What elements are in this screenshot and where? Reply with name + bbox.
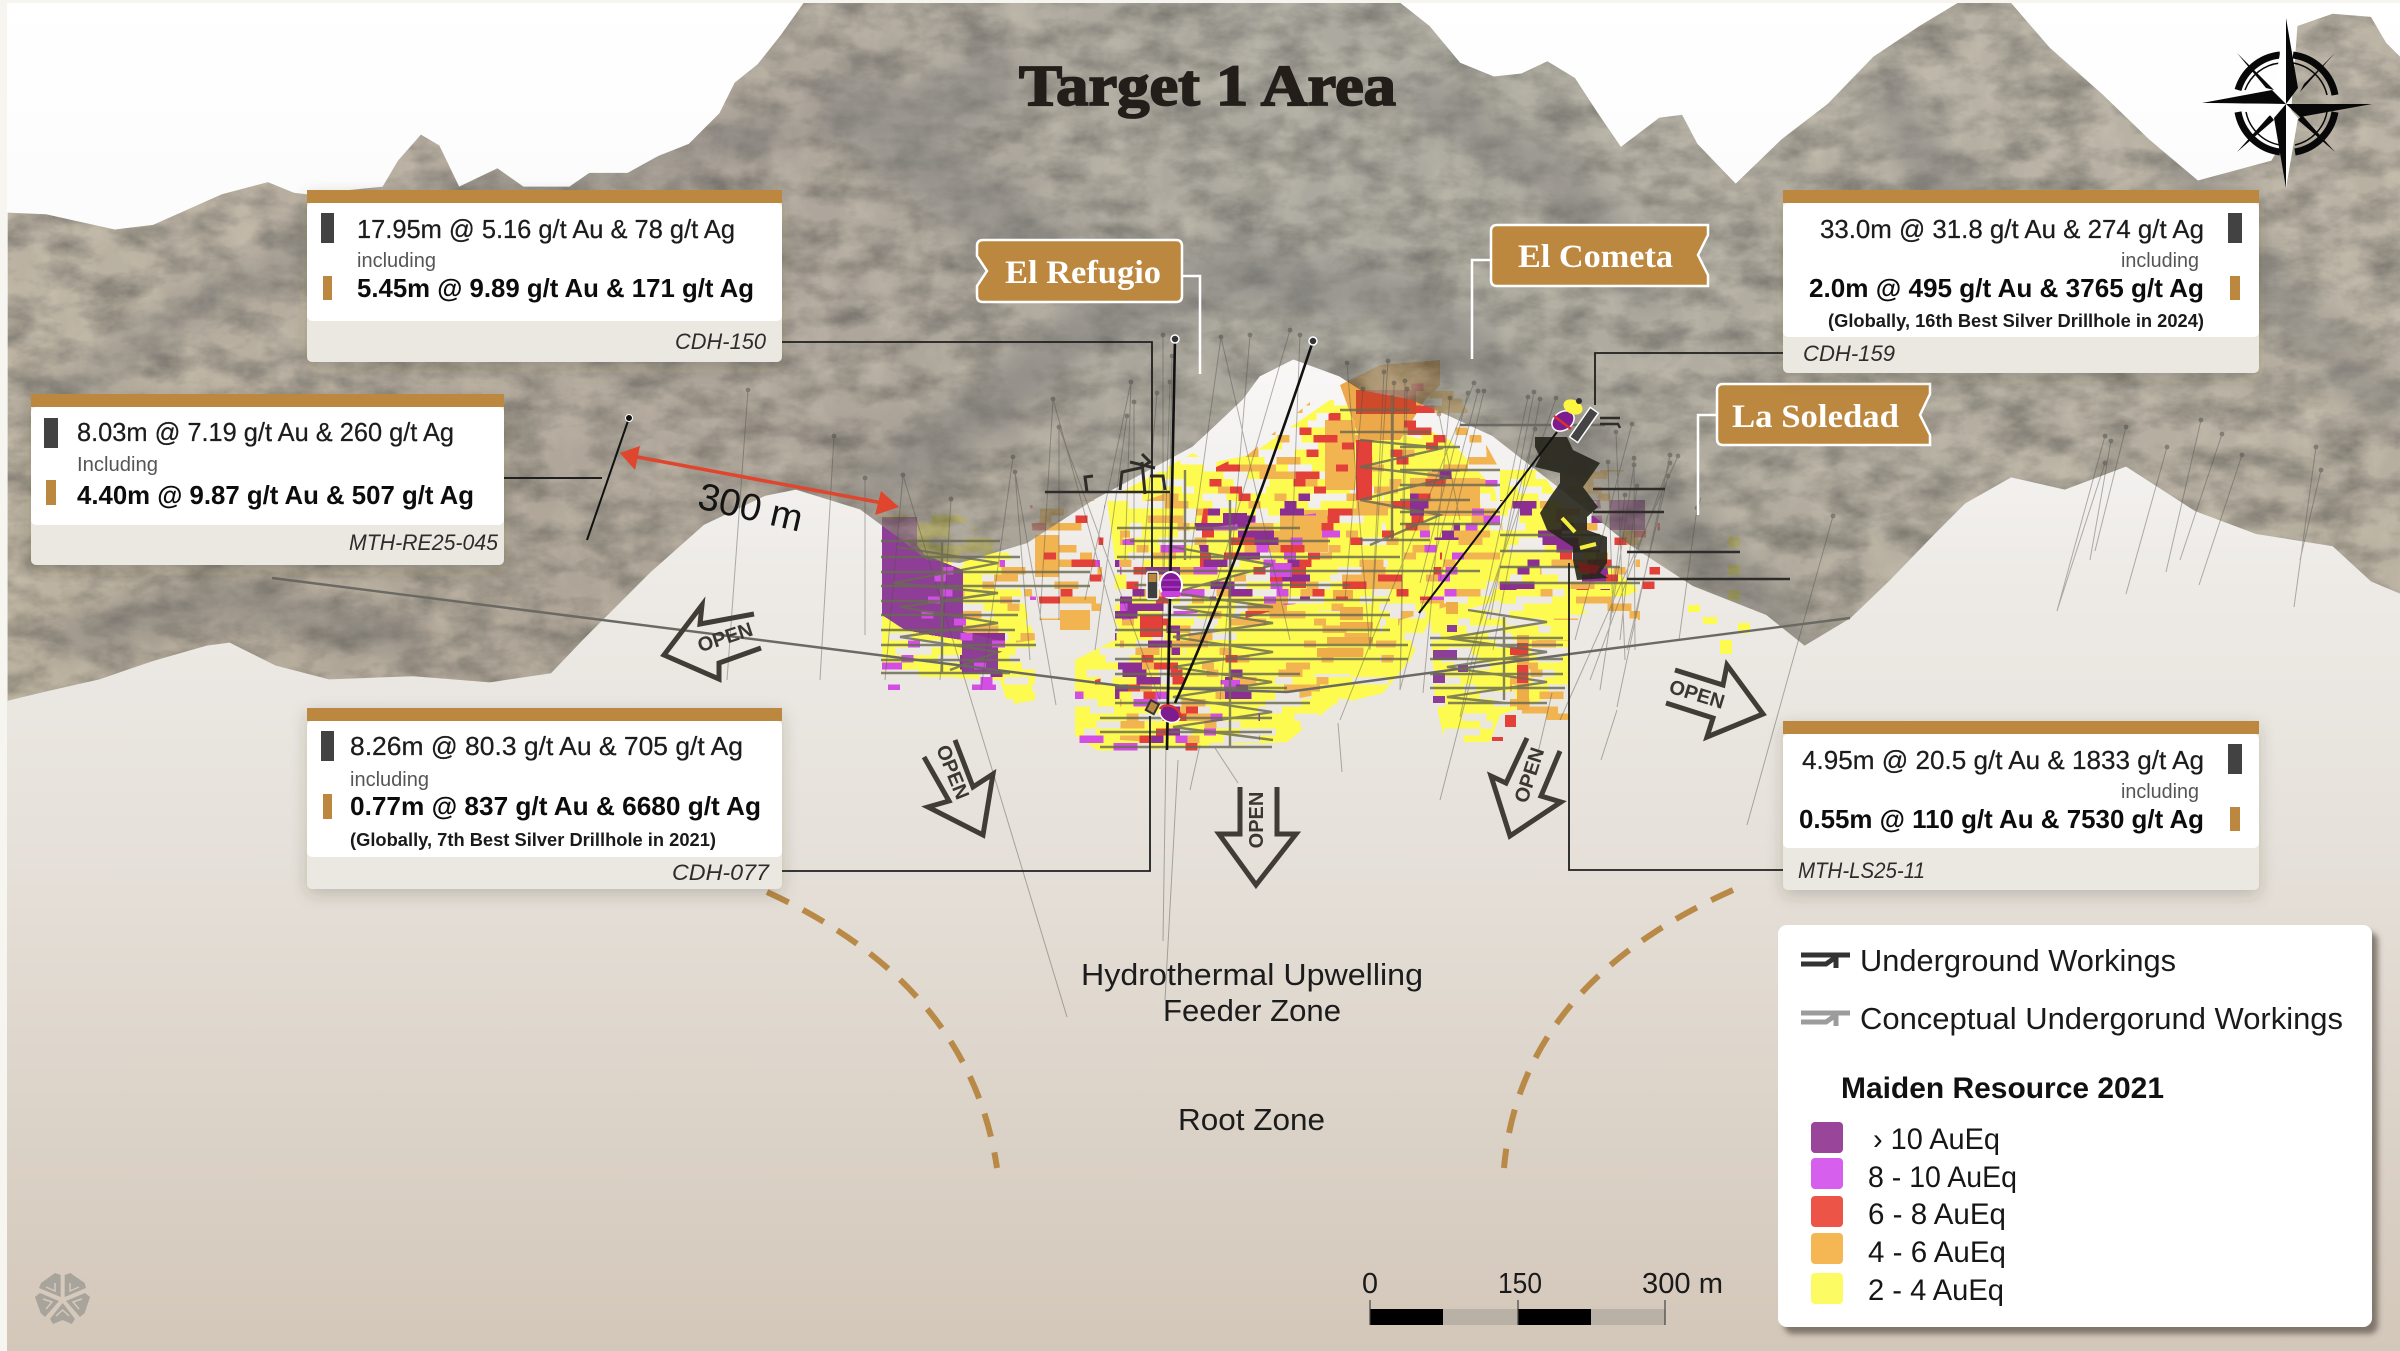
title: Target 1 Area — [1019, 53, 1396, 118]
tag: El Cometa: El Cometa — [1518, 239, 1673, 275]
panel: CDH-159 intercept: 2.0m @ 495 g/t Au & 3765 g/t Ag — [1809, 273, 2204, 303]
panel: CDH-077 intercept: 0.77m @ 837 g/t Au & 6680 g/t Ag — [350, 791, 761, 821]
label leader: La Soledad — [1698, 415, 1717, 515]
intercept marker: CDH-159 — [1548, 396, 1598, 443]
arrow: OPEN west: OPEN — [695, 619, 756, 657]
conceptual workings lines — [881, 395, 1640, 747]
dashed arc: right — [1504, 890, 1733, 1168]
panel: MTH-LS25-11 intercept: 0.55m @ 110 g/t Au & 7530 g/t Ag — [1799, 804, 2204, 834]
panel: CDH-077 intercept: CDH-077 — [672, 860, 770, 885]
legend panel: Underground Workings — [1860, 943, 2176, 978]
panel: CDH-159 intercept: including — [2121, 250, 2199, 272]
label: Hydrothermal Upwelling Feeder Zone: Feeder Zone — [1163, 993, 1341, 1028]
arrow: OPEN southeast — [1491, 738, 1561, 836]
drill trace: CDH-150 — [1167, 335, 1179, 750]
icon: conceptual workings — [1801, 1013, 1850, 1026]
drill hole traces — [727, 328, 2323, 1017]
icon: company logo — [35, 1273, 90, 1324]
arrow: OPEN southwest — [924, 740, 993, 835]
legend swatches: 4 - 6 AuEq — [1868, 1236, 2006, 1269]
panel: MTH-RE25-045 intercept: MTH-RE25-045 — [349, 530, 499, 555]
panel: CDH-159 intercept: (Globally, 16th Best Silver Drillhole in 2024) — [1828, 311, 2204, 331]
connector: MTH-LS25-11 — [1569, 563, 1783, 870]
tag: El Refugio: El Refugio — [1005, 255, 1161, 291]
arrow: OPEN west — [664, 605, 761, 679]
panel: MTH-RE25-045 intercept: 8.03m @ 7.19 g/t Au & 260 g/t Ag — [77, 417, 454, 447]
panel: MTH-RE25-045 intercept — [31, 394, 504, 565]
connector: MTH-RE25-045 — [504, 477, 602, 479]
resource block model — [860, 360, 1780, 747]
arrow: OPEN southwest: OPEN — [931, 742, 973, 803]
arrow: OPEN southeast: OPEN — [1511, 745, 1549, 806]
tag: La Soledad: La Soledad — [1732, 399, 1899, 435]
panel: CDH-077 intercept: including — [350, 769, 429, 791]
long section lines — [272, 425, 1850, 692]
drill trace: MTH-RE25-045 — [587, 414, 632, 540]
legend heading: Maiden Resource 2021 — [1841, 1072, 2164, 1105]
icon: underground workings — [1801, 955, 1850, 968]
panel: CDH-150 intercept: including — [357, 250, 436, 272]
label leader: El Refugio — [1182, 276, 1200, 374]
legend swatches: 2 - 4 AuEq — [1868, 1274, 2004, 1307]
panel: MTH-LS25-11 intercept: 4.95m @ 20.5 g/t Au & 1833 g/t Ag — [1802, 745, 2204, 775]
connector: CDH-150 — [782, 342, 1152, 567]
scale bar: 150 — [1498, 1268, 1542, 1300]
panel: MTH-LS25-11 intercept — [1783, 721, 2259, 890]
panel: CDH-077 intercept: 8.26m @ 80.3 g/t Au & 705 g/t Ag — [350, 731, 743, 761]
intercept marker: CDH-077 — [1146, 700, 1183, 726]
panel: MTH-RE25-045 intercept: Including — [77, 454, 158, 476]
connector: CDH-077 — [782, 716, 1150, 871]
panel: MTH-RE25-045 intercept: 4.40m @ 9.87 g/t Au & 507 g/t Ag — [77, 480, 474, 510]
drill trace: CDH-159 — [1419, 432, 1557, 613]
intercept marker: CDH-150 — [1147, 572, 1182, 599]
arrow: OPEN south: OPEN — [1246, 792, 1268, 848]
arrow: OPEN east: OPEN — [1666, 676, 1727, 714]
panel: CDH-150 intercept: CDH-150 — [675, 329, 767, 354]
panel: CDH-159 intercept — [1783, 190, 2259, 373]
label: Hydrothermal Upwelling Feeder Zone — [1081, 957, 1423, 1028]
tag: La Soledad — [1717, 384, 1930, 445]
panel: CDH-150 intercept — [307, 190, 782, 362]
legend swatches: 8 - 10 AuEq — [1868, 1161, 2017, 1194]
arrow: OPEN south — [1219, 787, 1296, 885]
red 300 m dimension arrow — [620, 446, 899, 515]
tag: El Refugio — [977, 240, 1182, 302]
300 m label: 300 m — [694, 476, 807, 540]
label: Root Zone: Root Zone — [1178, 1102, 1325, 1137]
dashed arc: left — [767, 892, 997, 1168]
scale bar — [1362, 1268, 1723, 1325]
legend swatches: 6 - 8 AuEq — [1868, 1198, 2006, 1231]
panel: MTH-LS25-11 intercept: MTH-LS25-11 — [1798, 858, 1925, 883]
drill trace: CDH-077 — [1175, 337, 1317, 703]
label leader: El Cometa — [1472, 260, 1491, 359]
panel: CDH-150 intercept: 5.45m @ 9.89 g/t Au & 171 g/t Ag — [357, 273, 754, 303]
scale bar: 300 m — [1642, 1268, 1723, 1300]
scale bar: 0 — [1362, 1268, 1378, 1300]
icon: compass rose — [2202, 18, 2372, 188]
tag: El Cometa — [1491, 225, 1708, 286]
panel: CDH-077 intercept — [307, 708, 782, 889]
panel: MTH-LS25-11 intercept: including — [2121, 781, 2199, 803]
legend swatches: › 10 AuEq — [1873, 1123, 2000, 1156]
connector: CDH-159 — [1595, 353, 1783, 405]
underground workings on section — [1045, 418, 1790, 579]
legend panel — [1778, 925, 2372, 1327]
panel: CDH-150 intercept: 17.95m @ 5.16 g/t Au & 78 g/t Ag — [357, 214, 735, 244]
legend swatches — [1811, 1122, 2017, 1307]
label: Hydrothermal Upwelling Feeder Zone: Hydrothermal Upwelling — [1081, 957, 1423, 992]
panel: CDH-159 intercept: CDH-159 — [1803, 341, 1895, 366]
panel: CDH-077 intercept: (Globally, 7th Best Silver Drillhole in 2021) — [350, 830, 716, 850]
mountain backdrop — [0, 0, 2400, 720]
arrow: OPEN east — [1666, 665, 1763, 737]
panel: CDH-159 intercept: 33.0m @ 31.8 g/t Au & 274 g/t Ag — [1820, 214, 2204, 244]
orebody: La Soledad dark mass — [1535, 437, 1608, 580]
legend panel: Conceptual Undergorund Workings — [1860, 1001, 2343, 1036]
